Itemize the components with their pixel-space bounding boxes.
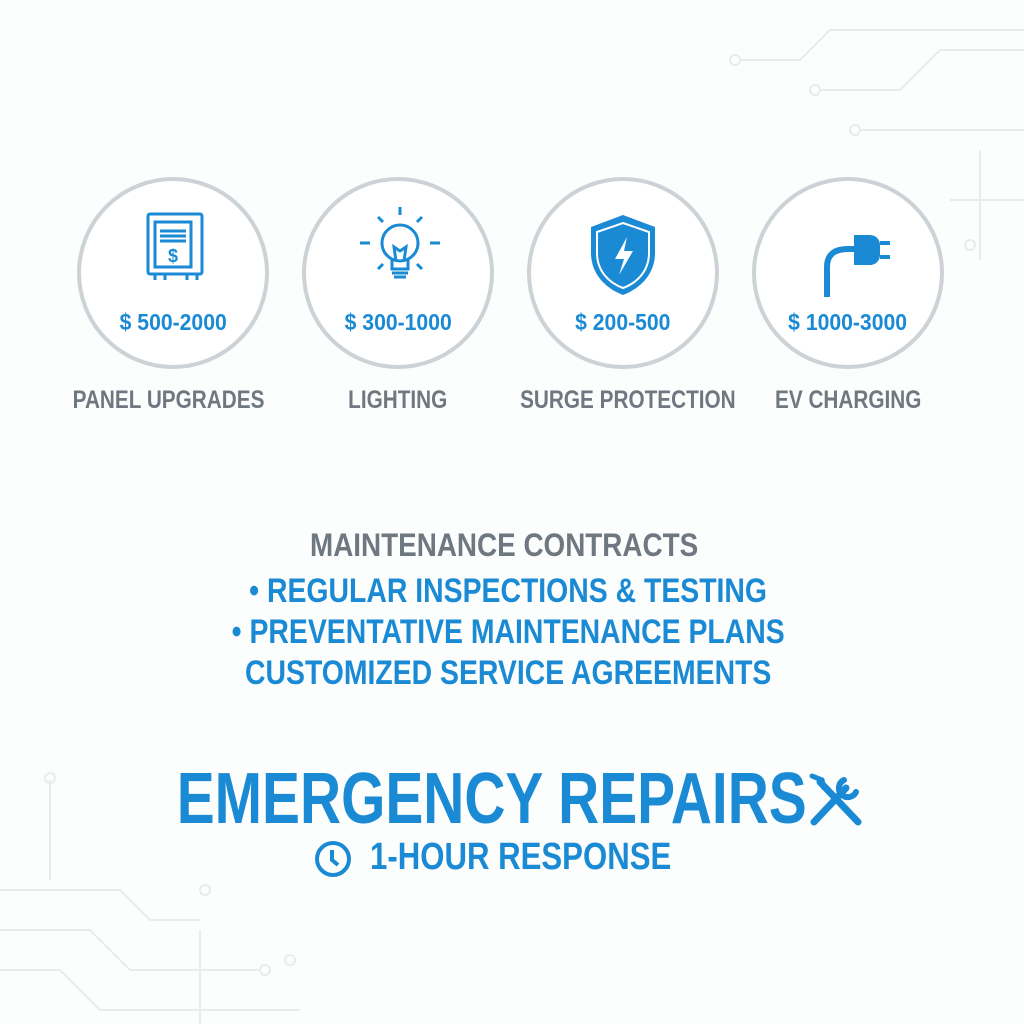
price: $ 300-1000: [344, 309, 452, 335]
text: 1-hour response: 1-HOUR RESPONSE: [370, 836, 671, 878]
price: $ 500-2000: [119, 309, 227, 335]
text block: maintenance list: [231, 572, 785, 692]
text block: maintenance list: • REGULAR INSPECTIONS & TESTING: [249, 572, 767, 610]
panel: ev charging: [752, 177, 944, 369]
icon: light bulb: [360, 207, 440, 278]
price: $ 200-500: [575, 309, 671, 335]
icon: plug: [824, 235, 890, 297]
price: $ 1000-3000: [789, 309, 907, 335]
icon: electrical panel: [146, 212, 204, 280]
label: ev charging: EV CHARGING: [775, 386, 921, 414]
icon: shield: [591, 215, 655, 295]
icon: electrical panel: $: [168, 246, 178, 266]
text block: maintenance list: • PREVENTATIVE MAINTENANCE PLANS: [231, 613, 785, 651]
text block: maintenance list: CUSTOMIZED SERVICE AGREEMENTS: [245, 654, 771, 692]
label: panel upgrades: PANEL UPGRADES: [73, 386, 265, 414]
panel: lighting: [302, 177, 494, 369]
label: lighting: LIGHTING: [348, 386, 448, 414]
heading: emergency repairs: EMERGENCY REPAIRS: [177, 759, 807, 839]
icon: clock: [315, 841, 351, 877]
panel: panel upgrades: [77, 177, 269, 369]
panel: surge protection: [527, 177, 719, 369]
icon: wrench and screwdriver: [810, 774, 862, 826]
heading: maintenance contracts: MAINTENANCE CONTRACTS: [310, 527, 698, 563]
label: surge protection: SURGE PROTECTION: [520, 386, 736, 414]
